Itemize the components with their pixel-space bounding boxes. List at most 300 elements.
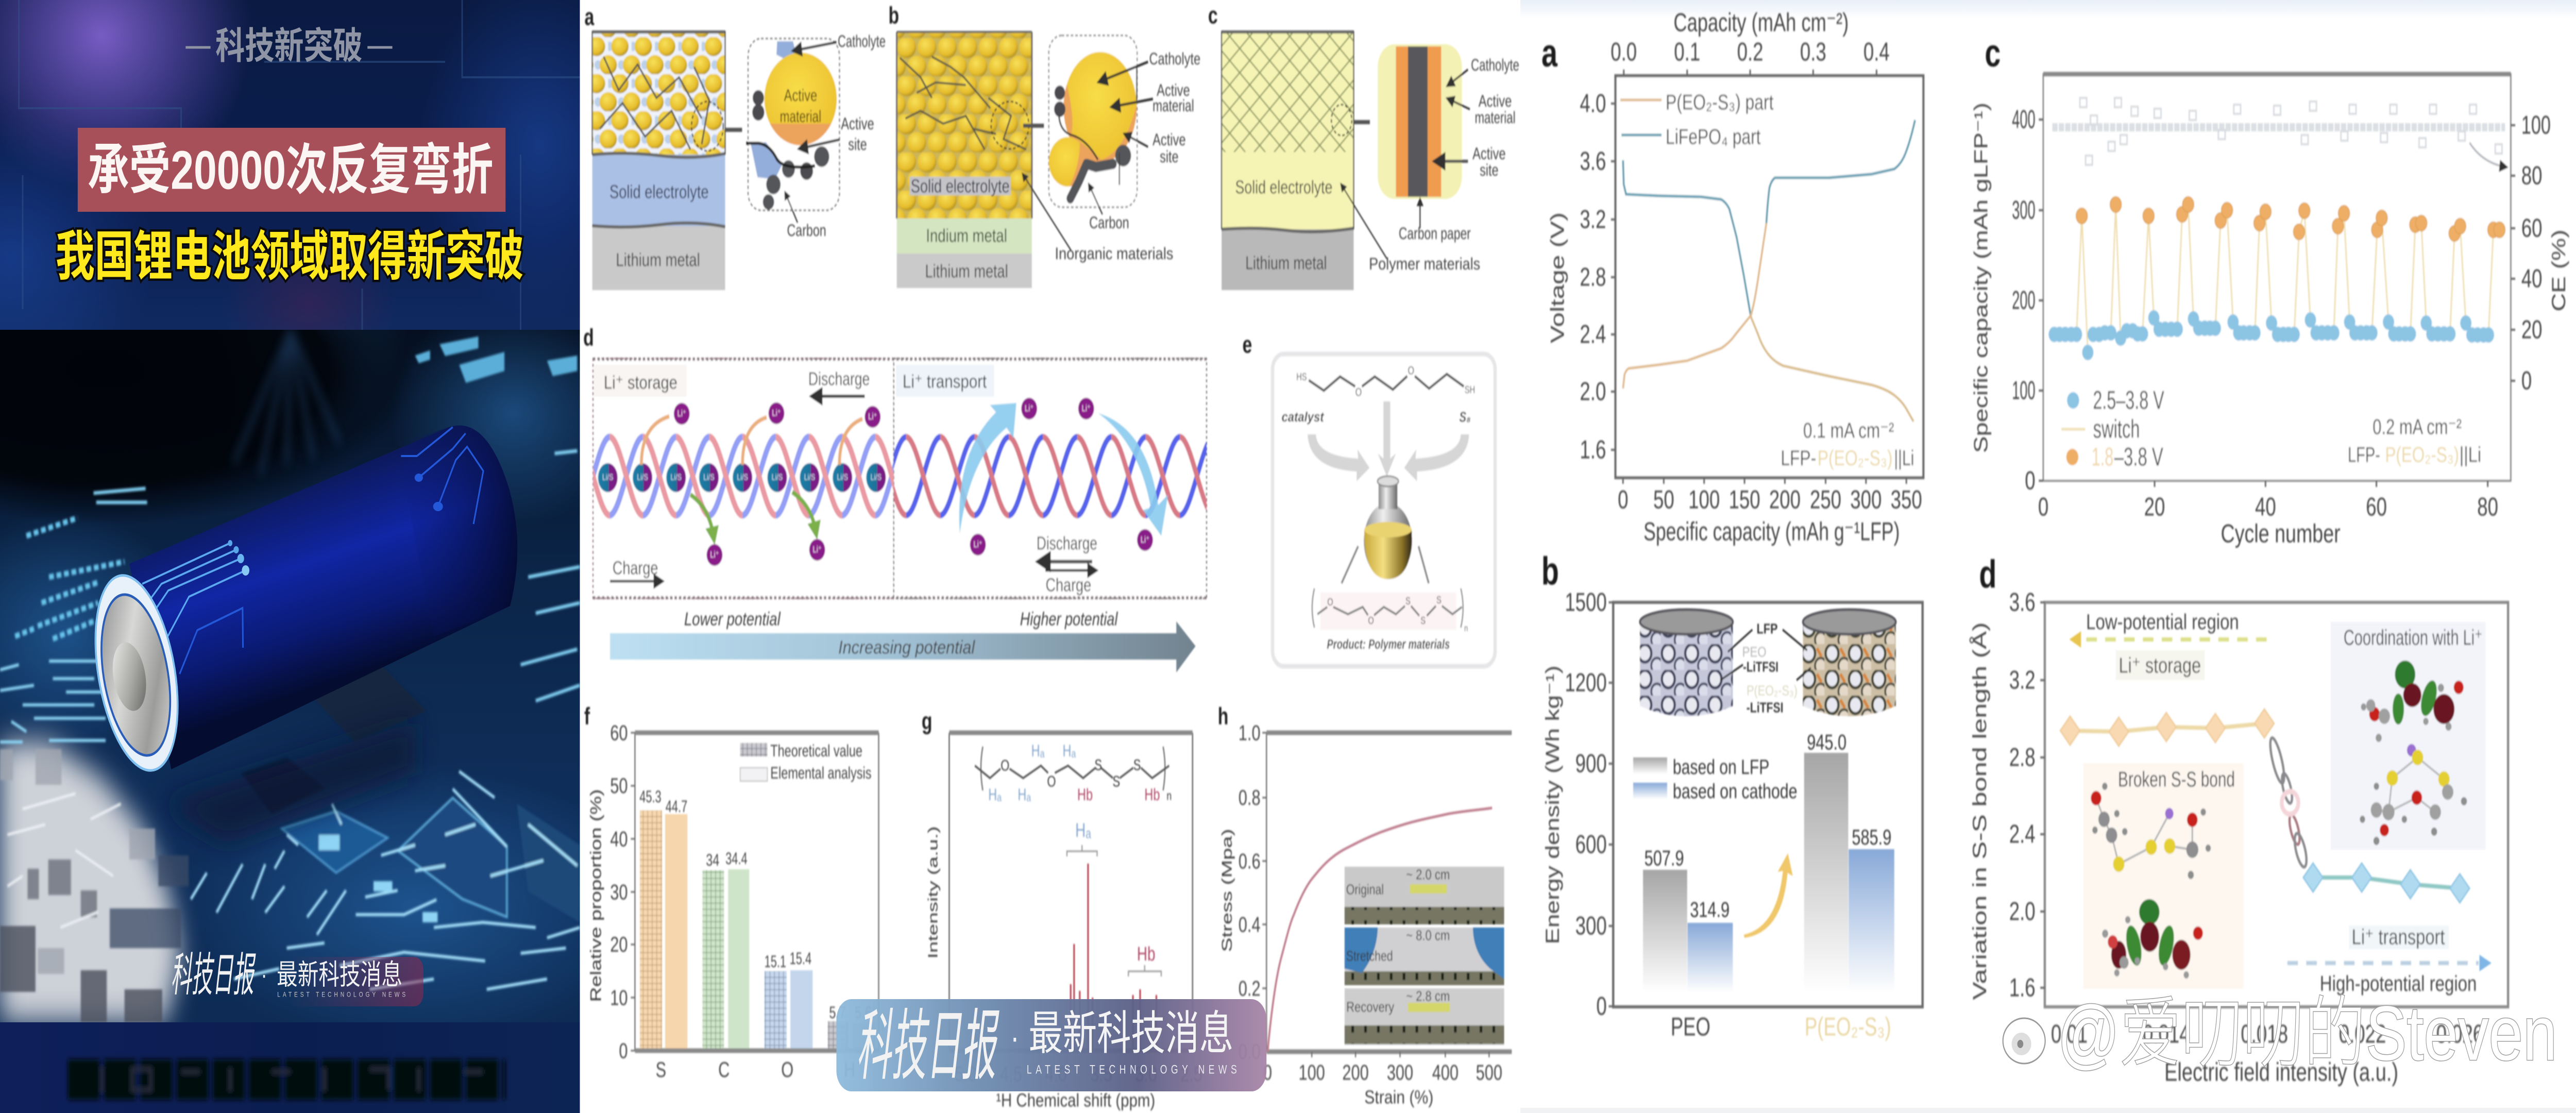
chart d ticks and titles: 2.8 [2009,743,2036,772]
panel f: element proportions bar chart [584,703,878,1082]
g axis text: Intensity (a.u.) [925,826,940,958]
synthesis card [1273,354,1495,666]
chart b values: 945.0 [1807,730,1846,754]
Li/S spheres: Li/S [871,473,882,482]
Li+ ions: Li⁺ [677,409,686,419]
chart d ticks and titles: 0.01 [2051,1020,2088,1049]
potential gradient arrow: Increasing potential [838,636,975,658]
chart c ticks and titles: Specific capacity (mAh gLFP⁻¹) [1971,103,1992,453]
f tick labels: 10 [610,986,628,1009]
zoomed detail a: Active [784,86,817,105]
Li/S spheres [598,463,886,492]
g axis text: 2.5 [1180,1062,1202,1086]
chart c annotation: 0.2 mA cm⁻² [2372,415,2462,439]
chart c ticks and titles: 100 [2012,376,2036,405]
chart b ticks and titles: 0 [1596,992,1607,1021]
g polymer structure: O [1047,772,1056,790]
chart b ticks and titles: 600 [1575,830,1607,859]
label d: d [583,324,594,351]
chart a ticks: 100 [1688,485,1720,514]
electrode labels: P(EO₂-S₃) [1747,683,1798,699]
helix annotations: Discharge [1037,532,1097,554]
g polymer structure: S [1112,772,1120,790]
chart c annotation: LFP- [2348,443,2380,466]
helix annotations [604,368,1097,596]
chart c ticks and titles: 400 [2012,105,2036,134]
cathode stack b: Indium metal [926,225,1007,246]
chart d ticks and titles: 0.022 [2339,1020,2386,1049]
chart b values [1645,730,1891,921]
chart d label: d [1979,553,1996,596]
f value labels: 44.7 [666,797,687,816]
chart a ticks: 2.4 [1580,320,1606,349]
f axis title: Relative proportion (%) [588,789,604,1002]
chart a ticks [1580,38,1922,514]
Weibo watermark [2003,990,2557,1076]
zoomed detail b: Carbon [1089,213,1129,232]
cathode stack b [897,32,1044,288]
f value labels: 34 [706,851,719,869]
panel b: inorganic with indium [888,2,1200,288]
Li/S spheres: Li/S [804,473,815,482]
molecule: coordination with Li+ [2360,744,2467,845]
chart b ticks and titles: PEO [1671,1013,1710,1041]
zoomed detail a [746,32,886,240]
chart d annotations: High-potential region [2320,972,2477,996]
f tick labels: 30 [610,880,628,904]
zoomed detail c: Carbon paper [1399,224,1471,243]
zoomed detail c: material [1475,108,1516,127]
chart a curves [1623,120,1915,421]
circuit board photo [0,330,580,1022]
chart d annotations: Li⁺ transport [2352,925,2445,949]
panel a: inorganic cathode [584,4,886,290]
transition chain [2267,736,2309,869]
chart d ticks and titles: 0.014 [2143,1020,2190,1049]
panel: news cover with battery [0,0,580,1113]
h tick labels and titles: 100 [1298,1060,1325,1084]
chart a ticks: 3.2 [1580,205,1606,234]
g peaks [1067,820,1161,1049]
chart c ticks and titles: 40 [2255,493,2276,521]
chart d: bond length vs field [1970,553,2508,1087]
Li+ ions: Li⁺ [813,545,822,555]
electrode cylinder P(EO2-S3) [1803,610,1896,716]
label a: a [584,4,595,30]
overlay watermark: Science and Technology Daily: LATEST TECHNOLOGY NEWS [1027,1063,1237,1076]
helix strands [577,437,1214,515]
overlay watermark: Science and Technology Daily: 科技日报 [856,1003,999,1089]
chart c label: c [1985,32,2001,75]
Li/S spheres: Li/S [637,473,648,482]
g polymer structure: Hₐ [1018,785,1031,804]
polymer product: n [1464,623,1468,634]
chart a ticks: 300 [1850,485,1882,514]
panel h: stress-strain chart [1218,703,1512,1108]
electrode labels: -LiTFSI [1743,660,1778,675]
chart c ticks and titles: 100 [2521,111,2551,140]
polymer product: O [1327,596,1333,608]
panel e: polymer synthesis [1243,331,1495,666]
electrode cylinder PEO [1640,610,1733,716]
high potential diamonds [2303,863,2469,903]
f value labels [639,787,872,1022]
Li+ ions [674,398,1153,566]
chart c ticks and titles: 0 [2521,366,2532,395]
g axis text: ¹H Chemical shift (ppm) [996,1089,1155,1111]
helix frame [593,359,1207,598]
chart a ticks: 50 [1653,485,1674,514]
g axis text: 4.5 [1000,1062,1022,1086]
g axis text [925,826,1202,1111]
zoomed detail b: Active [1153,130,1186,149]
chart d frame [2040,602,2508,1007]
g axis text: 4.0 [1045,1062,1067,1086]
cathode stack b: Lithium metal [925,260,1008,282]
g polymer structure: S [1094,756,1102,773]
potential gradient arrow: Higher potential [1020,608,1118,630]
chart a annotation: LFP- [1781,446,1816,470]
chart d ticks and titles: 2.4 [2009,820,2036,849]
chart c ticks and titles: 80 [2521,161,2543,190]
CE arrow [2469,143,2505,167]
h tick labels and titles: 0.8 [1239,786,1261,810]
switch line [2076,205,2499,352]
monomer structure: SH [1465,384,1475,395]
chart c legend: –3.8 V [2114,443,2163,471]
h sample photo inset: ~ 8.0 cm [1406,928,1450,943]
cover watermark [171,949,423,1006]
orbital: coordination with Li+ [2361,661,2464,742]
chart d ticks and titles: 2.0 [2009,897,2036,926]
chart c legend [2061,386,2164,471]
Li+ ions: Li⁺ [772,408,781,418]
h tick labels and titles: 0.2 [1239,976,1261,1000]
panel: battery performance charts [1541,8,2570,1087]
zoomed detail a: Catholyte [838,32,886,50]
chart c annotation: ||Li [2460,443,2481,466]
Li/S spheres: Li/S [772,473,783,482]
f tick labels: S [656,1058,666,1082]
polymer product: S [1436,594,1442,605]
f value labels: 5.7 [829,1003,846,1022]
g polymer structure: Hb [1077,785,1093,804]
chart c ticks and titles: 0 [2025,466,2036,495]
h sample photo inset [1345,867,1504,1045]
chart a ticks: 0.3 [1800,38,1826,66]
chart d ticks and titles: 0.026 [2436,1020,2483,1049]
f value labels: 45.3 [639,787,662,806]
chart c ticks and titles: Cycle number [2221,519,2341,548]
chart a ticks: 2.8 [1580,263,1606,292]
g polymer structure: Hₐ [1062,741,1076,760]
Li+ ions: Li⁺ [973,539,982,550]
f tick labels: 40 [610,827,628,851]
low potential diamonds [2060,709,2274,746]
h tick labels and titles: 0.0 [1239,1040,1261,1064]
monomer structure: HS [1296,371,1307,382]
zoomed detail b: Active [1157,81,1190,99]
chart c: cycling performance [1971,32,2570,548]
chart c annotation: P(EO₂-S₃) [2385,443,2459,466]
electrode labels: PEO [1742,645,1767,660]
chart b ticks and titles: Energy density (Wh kg⁻¹) [1543,665,1564,944]
chart a ticks: 4.0 [1580,89,1606,118]
g polymer structure: S [1133,756,1141,773]
chart c ticks and titles: 200 [2012,286,2036,315]
cathode stack a [592,31,742,290]
cover watermark: LATEST TECHNOLOGY NEWS [277,990,405,999]
f tick labels: 50 [610,774,628,798]
chart d annotations: Low-potential region [2086,610,2239,634]
helix annotations: Charge [1046,574,1091,596]
f axes [631,733,878,1051]
chart a label: a [1541,32,1558,75]
monomer structure: O [1355,386,1362,399]
chart c ticks and titles: 80 [2477,493,2498,521]
chart c ticks and titles: 40 [2521,264,2543,293]
h tick labels and titles: 400 [1432,1060,1459,1084]
polymer product: O [1368,615,1374,626]
chart c legend: 1.8 [2092,443,2113,471]
cathode stack c: Lithium metal [1245,252,1327,274]
g polymer structure: n [1166,789,1172,803]
reagents text: S₈ [1459,410,1470,425]
h tick labels and titles [1219,721,1502,1108]
chart b legend: based on cathode [1673,780,1798,803]
chart a legend: LiFePO₄ part [1666,125,1761,148]
electrode labels: -LiTFSI [1747,700,1783,716]
f value labels: 15.4 [790,949,811,968]
chart a annotation: P(EO₂-S₃) [1818,446,1892,470]
Li+ ions: Li⁺ [868,412,877,422]
cover watermark: · [261,960,267,989]
chart a ticks: 3.6 [1580,147,1606,176]
potential gradient arrow [610,608,1196,672]
label c: c [1208,2,1218,29]
battery [81,426,517,783]
cover watermark: 科技日报 [171,949,256,1001]
f legend: Theoretical value [770,741,862,760]
chart c ticks and titles: CE (%) [2549,229,2570,311]
chart b ticks and titles [1543,588,1891,1041]
zoomed detail a: Active [841,114,874,133]
h curve [1267,808,1492,1052]
grey reaction arrows [1308,401,1469,481]
cathode stack a: Lithium metal [616,249,700,271]
chart b ticks and titles: 900 [1575,749,1607,778]
overlay watermark: Science and Technology Daily: 最新科技消息 [1029,1007,1233,1059]
cover top banner [0,0,580,330]
Li+ ions: Li⁺ [710,550,719,560]
chart d annotations: Li⁺ storage [2119,653,2201,677]
g axis text: 3.5 [1090,1062,1112,1086]
Li+ ions: Li⁺ [1141,535,1149,545]
chart b label: b [1541,550,1559,593]
Li/S spheres: Li/S [602,473,613,482]
chart c legend: switch [2093,415,2140,444]
overlay watermark: Science and Technology Daily [836,999,1266,1091]
chart a: voltage profile [1541,8,1923,546]
g axis text: 3.0 [1135,1062,1157,1086]
polymer product: S [1420,615,1426,626]
chart b legend: based on LFP [1673,756,1769,779]
chart c legend: 2.5–3.8 V [2093,386,2164,415]
chart c ticks and titles: 60 [2521,214,2543,243]
chart d ticks and titles [1970,588,2483,1087]
chart a ticks: 0 [1618,485,1628,514]
chart b frame [1608,602,1923,1007]
reagents text: catalyst [1282,409,1325,425]
h sample photo inset: ~ 2.8 cm [1406,989,1450,1004]
g polymer structure: Hₐ [988,785,1002,804]
zoomed detail a: material [780,107,821,126]
cathode stack b: Solid electrolyte [911,175,1010,197]
chart b ticks and titles: 1500 [1565,588,1607,617]
f tick labels: C [718,1058,730,1082]
chart a ticks: 250 [1810,485,1841,514]
zoomed detail c [1342,44,1519,273]
chart a ticks: 0.0 [1611,38,1637,66]
f value labels: 34.4 [725,849,748,868]
cathode stack a: Solid electrolyte [609,181,709,203]
electrode labels [1720,621,1811,716]
high-voltage blue points [2048,310,2494,360]
zoomed detail b: site [1160,147,1179,166]
chart b legend [1633,756,1798,803]
zoomed detail b: Catholyte [1149,49,1200,68]
label g: g [922,708,932,735]
bottom strip of right charts [1520,1108,2576,1113]
chart d ticks and titles: Variation in S-S bond length (Å) [1970,622,1990,1000]
g polymer structure: O [1001,756,1009,774]
electrode labels: LFP [1756,621,1777,637]
f legend: Elemental analysis [770,764,872,782]
zoomed detail c: Active [1472,144,1506,163]
panel g: NMR spectrum [922,708,1202,1111]
chart a ticks: 200 [1769,485,1801,514]
g axis text: 5.0 [955,1062,977,1086]
helix annotations: Charge [613,557,658,579]
panel d: Li storage and transport helix [577,324,1214,672]
chart c frame [2039,74,2515,487]
chart d ticks and titles: 1.6 [2009,973,2036,1002]
chart d annotations: Broken S-S bond [2118,767,2235,791]
f bars [640,811,875,1051]
f value labels: 5.6 [855,1003,872,1022]
f legend [740,741,872,782]
f tick labels [610,721,855,1082]
panel: schematic diagrams a–h [577,2,1519,1111]
reaction arrows [641,403,1168,536]
chart a annotation: 0.1 mA cm⁻² [1803,418,1894,442]
label b: b [888,2,899,29]
overlay watermark: Science and Technology Daily: · [1010,1017,1019,1057]
cathode stack c: Solid electrolyte [1235,176,1332,198]
molecule: broken S-S bond [2091,783,2211,879]
chart d annotations: Coordination with Li⁺ [2344,626,2482,649]
f value labels: 15.1 [765,952,786,971]
chart a legend [1620,90,1773,148]
icon: weibo logo [2003,1014,2048,1064]
f tick labels: 60 [610,721,628,745]
polymer product: Product: Polymer materials [1327,636,1450,652]
helix annotations: Li⁺ transport [903,370,987,392]
label h: h [1218,703,1228,730]
Li/S spheres: Li/S [703,473,715,482]
chart b: energy density [1541,550,1923,1041]
chart d ticks and titles: Electric field intensity (a.u.) [2164,1058,2398,1087]
h sample photo inset: Recovery [1346,1000,1395,1015]
chart c ticks and titles: 20 [2521,315,2543,344]
cover bottom band [0,1022,580,1113]
chart a ticks: 1.6 [1580,435,1606,464]
coulombic efficiency squares [2053,98,2505,165]
chart b bars [1643,753,1894,992]
chart a titles: Capacity (mAh cm⁻²) [1673,8,1849,37]
g peaks: Hb [1137,943,1155,965]
h tick labels and titles: 500 [1476,1060,1502,1084]
chart c ticks and titles: 0 [2038,493,2048,521]
helix annotations: Li⁺ storage [604,372,677,393]
chart b ticks and titles: P(EO₂-S₃) [1805,1013,1891,1041]
zoomed detail b: Inorganic materials [1055,244,1173,263]
Li+ ions: Li⁺ [1025,403,1033,414]
Li/S spheres: Li/S [671,473,682,482]
h axes [1262,733,1512,1057]
Li+ ions: Li⁺ [1082,403,1091,414]
h tick labels and titles: 0.6 [1239,849,1261,873]
h tick labels and titles: 0 [1263,1060,1272,1084]
zoomed detail c: Active [1479,92,1512,110]
cover watermark: 最新科技消息 [277,959,402,991]
label e: e [1243,331,1252,358]
chart b ticks and titles: 300 [1575,912,1607,940]
chart d ticks and titles: 0.018 [2241,1020,2288,1049]
reagents text [1282,409,1470,425]
g axes [949,733,1193,1051]
h tick labels and titles: Stress (Mpa) [1219,829,1235,952]
chart a titles: Specific capacity (mAh g⁻¹LFP) [1643,517,1900,546]
chart d ticks and titles: 3.6 [2009,588,2036,617]
g peaks: Hₐ [1075,820,1091,841]
g polymer structure: Hb [1144,785,1160,804]
panel c: polymer cathode [1208,2,1519,290]
chart a titles: Voltage (V) [1547,212,1568,343]
zoomed detail b: material [1153,96,1194,115]
chart a ticks: 0.1 [1674,38,1700,66]
Li/S spheres: Li/S [837,473,848,482]
zoomed detail a: site [848,135,867,154]
helix annotations: Discharge [808,368,870,390]
chart d ticks and titles: 3.2 [2009,666,2036,695]
account handle: @爱叨叨的Steven [2057,990,2557,1076]
cathode stack c [1222,31,1370,290]
chart c ticks and titles [1971,103,2570,548]
polymer product: S [1405,595,1411,606]
chart b growth arrow [1744,853,1793,938]
zoomed detail c: site [1480,161,1499,179]
label f: f [584,703,590,730]
h tick labels and titles: 0.4 [1239,913,1261,936]
g polymer structure [975,741,1172,804]
yellow headline: 我国锂电池领域取得新突破 [56,227,524,286]
chart a annotation [1781,418,1914,470]
h sample photo inset: Stretched [1346,949,1393,964]
chart d annotations [2070,610,2492,996]
round-bottom flask [1342,476,1429,583]
orbital: broken S-S bond [2102,899,2203,979]
